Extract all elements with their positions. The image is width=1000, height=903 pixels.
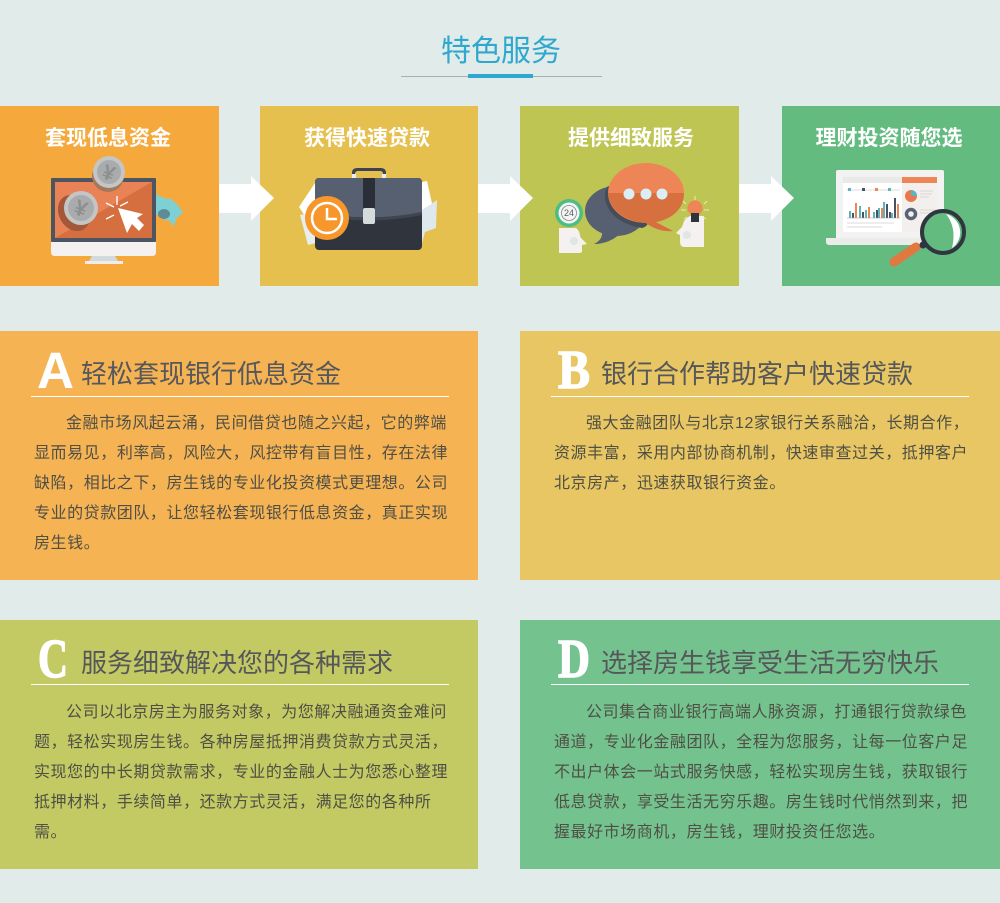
panel: A <box>0 331 478 580</box>
panel: step 2 <box>260 106 478 286</box>
body text D <box>554 698 968 842</box>
step 2 heading: 获得快速贷款 <box>304 127 430 150</box>
title text: 特色服务 <box>441 35 561 68</box>
body text B: 强大金融团队与北京12家银行关系融洽，长期合作， <box>586 409 969 433</box>
step 3 heading: 提供细致服务 <box>568 127 694 150</box>
heading A: 轻松套现银行低息资金 <box>81 359 341 389</box>
body text A: 金融市场风起云涌，民间借贷也随之兴起，它的弊端 <box>66 409 447 433</box>
step 4 heading: 理财投资随您选 <box>816 127 962 150</box>
icon: speech bubbles and heads <box>555 163 709 253</box>
body text A: 房生钱。 <box>34 535 100 552</box>
icon: monitor with coins <box>51 156 183 264</box>
panel: D <box>520 620 1000 869</box>
body text C: 抵押材料，手续简单，还款方式灵活，满足您的各种所 <box>34 788 431 812</box>
body text D: 不出户体会一站式服务快感，轻松实现房生钱，获取银行 <box>554 758 968 782</box>
body text D: 公司集合商业银行高端人脉资源，打通银行贷款绿色 <box>586 698 967 722</box>
letter D: D <box>558 628 590 689</box>
arrow 2 <box>478 176 533 221</box>
icon: speech bubbles and heads: 24 <box>564 208 574 218</box>
arrow 1 <box>219 176 274 221</box>
body text C <box>34 698 448 841</box>
body text D: 低息贷款，享受生活无穷乐趣。房生钱时代悄然到来，把 <box>554 788 968 812</box>
step 1 heading: 套现低息资金 <box>45 127 171 150</box>
body text D: 握最好市场商机，房生钱，理财投资任您选。 <box>554 818 885 842</box>
body text C: 题，轻松实现房生钱。各种房屋抵押消费贷款方式灵活， <box>34 728 448 752</box>
body text C: 需。 <box>34 824 67 841</box>
body text A <box>34 409 448 552</box>
letter C: C <box>38 628 68 689</box>
body text C: 实现您的中长期贷款需求，专业的金融人士为您悉心整理 <box>34 758 448 782</box>
panel: step 1 <box>0 106 219 286</box>
panel: B <box>520 331 1000 580</box>
body text C: 公司以北京房主为服务对象，为您解决融通资金难问 <box>66 698 447 722</box>
icon: monitor with coins: ¥ <box>99 161 118 186</box>
panel: step 3 <box>520 106 739 286</box>
arrow 3 <box>739 176 794 221</box>
body text D: 通道，专业化金融团队，全程为您服务，让每一位客户足 <box>554 728 968 752</box>
body text A: 显而易见，利率高，风险大，风控带有盲目性，存在法律 <box>34 439 448 463</box>
body text A: 专业的贷款团队，让您轻松套现银行低息资金，真正实现 <box>34 499 448 523</box>
heading B: 银行合作帮助客户快速贷款 <box>601 359 913 389</box>
body text B <box>554 409 969 493</box>
panel: C <box>0 620 478 869</box>
body text B: 资源丰富，采用内部协商机制，快速审查过关，抵押客户 <box>554 439 968 463</box>
letter B: B <box>558 339 590 400</box>
icon: monitor with coins: ¥ <box>71 195 92 223</box>
panel: step 4 <box>782 106 1000 286</box>
heading D: 选择房生钱享受生活无穷快乐 <box>601 648 939 678</box>
body text A: 缺陷，相比之下，房生钱的专业化投资模式更理想。公司 <box>34 469 448 493</box>
title underline <box>401 76 602 77</box>
letter A: A <box>37 342 74 399</box>
icon: briefcase with clock <box>299 168 437 250</box>
icon: laptop with magnifier <box>826 170 966 266</box>
title <box>401 35 602 78</box>
heading C: 服务细致解决您的各种需求 <box>81 648 393 678</box>
body text B: 北京房产，迅速获取银行资金。 <box>554 469 786 493</box>
